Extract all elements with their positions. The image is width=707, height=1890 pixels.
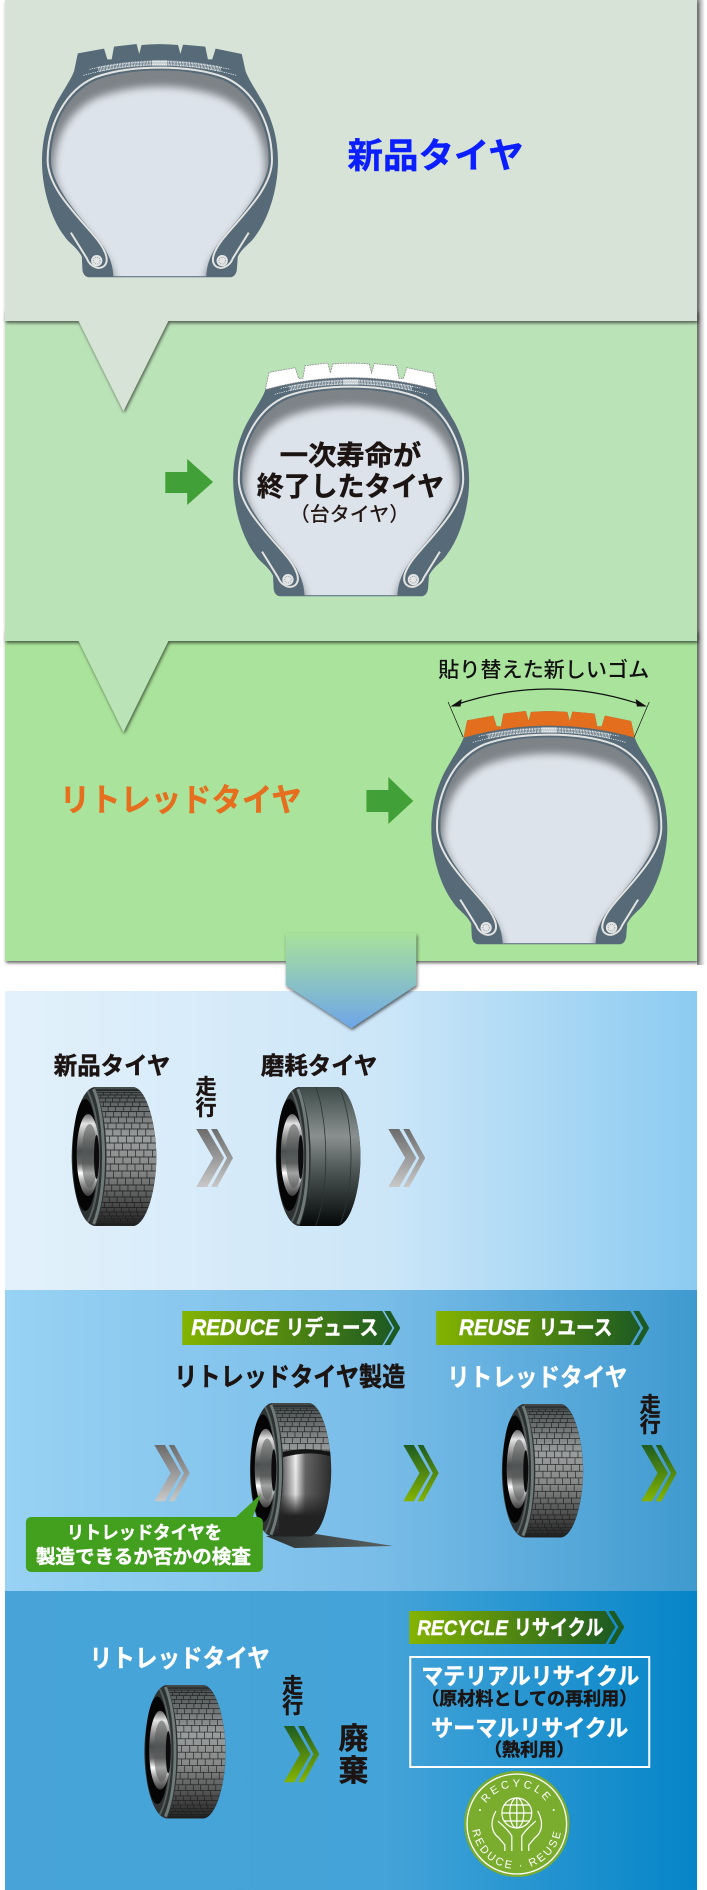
text: end of first life: 終了したタイヤ (257, 472, 444, 502)
arrow: grey chevron (154, 1445, 190, 1501)
arrow: to retread tire (366, 777, 413, 824)
label: running: 走 (282, 1675, 303, 1698)
icon: casing cross-section (233, 363, 469, 612)
label: running: 行 (640, 1414, 661, 1437)
arrow: grey chevron (388, 1129, 425, 1187)
banner: reuse: REUSE (459, 1315, 531, 1340)
label: worn tire: 磨耗タイヤ (261, 1053, 377, 1080)
label: running (640, 1394, 661, 1437)
page edge shadow (697, 0, 705, 965)
label: running: 行 (282, 1695, 303, 1718)
icon: new tire cross-section (42, 44, 278, 293)
banner: reduce: REDUCE (191, 1315, 280, 1340)
label: new tire: 新品タイヤ (54, 1053, 170, 1080)
callout: inspection: リトレッドタイヤを (67, 1523, 222, 1543)
arrow: down to lifecycle (286, 933, 416, 1028)
box: recycling types: サーマルリサイクル (431, 1715, 628, 1741)
label: running: 走 (640, 1394, 661, 1417)
label: disposal (339, 1723, 369, 1788)
label: running (196, 1076, 217, 1120)
heading: new tire: 新品タイヤ (348, 137, 524, 176)
label: disposal: 廃 (339, 1723, 369, 1756)
label: new rubber: 貼り替えた新しいゴム (438, 658, 649, 682)
banner: recycle: RECYCLE (417, 1617, 509, 1640)
panel: retread stage (5, 1290, 697, 1591)
panel: worn casing (5, 310, 697, 732)
banner: reduce (182, 1311, 400, 1345)
arrow: green chevron (641, 1445, 677, 1501)
icon: recycle badge: REDUCE · REUSE (472, 1829, 561, 1869)
banner: reuse (436, 1311, 649, 1345)
banner: recycle (409, 1611, 624, 1644)
label: disposal: 棄 (339, 1755, 369, 1788)
arrow: to casing (165, 459, 213, 505)
box: recycling types: マテリアルリサイクル (421, 1663, 639, 1689)
banner: reduce: リデュース (286, 1316, 378, 1340)
callout: inspection (26, 1494, 263, 1572)
icon: rubber sheet (266, 1534, 393, 1548)
banner: reuse: リユース (539, 1317, 612, 1340)
text: end of first life: 一次寿命が (280, 440, 421, 471)
dimension arc: new rubber width (448, 689, 649, 737)
box: recycling types (410, 1657, 649, 1767)
heading: retread tire: リトレッドタイヤ (60, 782, 302, 818)
panel: new tire (5, 0, 697, 411)
icon: retread tire cross-section (431, 711, 667, 960)
banner: recycle: リサイクル (514, 1617, 603, 1640)
label: retread manufacturing: リトレッドタイヤ製造 (174, 1363, 405, 1392)
icon: retread tire photo (144, 1685, 227, 1819)
panel: retread tire (5, 630, 697, 961)
icon: worn tire photo (276, 1087, 361, 1227)
icon: recycle badge (464, 1771, 570, 1877)
text: end of first life: （台タイヤ） (290, 503, 409, 526)
box: recycling types: （原材料としての再利用） (421, 1689, 637, 1709)
label: running: 走 (196, 1076, 217, 1099)
arrow: grey chevron (196, 1129, 233, 1187)
text: end of first life (257, 440, 444, 526)
callout: inspection: 製造できるか否かの検査 (36, 1546, 251, 1568)
label: running (282, 1675, 303, 1718)
icon: tire being retreaded (250, 1403, 332, 1537)
label: retread tire: リトレッドタイヤ (90, 1645, 270, 1673)
label: running: 行 (196, 1097, 217, 1120)
label: retread tire: リトレッドタイヤ (447, 1364, 627, 1392)
icon: retread tire photo (502, 1404, 584, 1538)
icon: recycle badge: RECYCLE (480, 1779, 551, 1803)
box: recycling types: （熱利用） (484, 1740, 575, 1760)
panel: recycle stage (5, 1591, 698, 1890)
arrow: green chevron (403, 1445, 439, 1501)
icon: new tire photo (72, 1087, 157, 1227)
panel: usage stage (5, 991, 697, 1290)
arrow: green chevron (284, 1726, 319, 1782)
